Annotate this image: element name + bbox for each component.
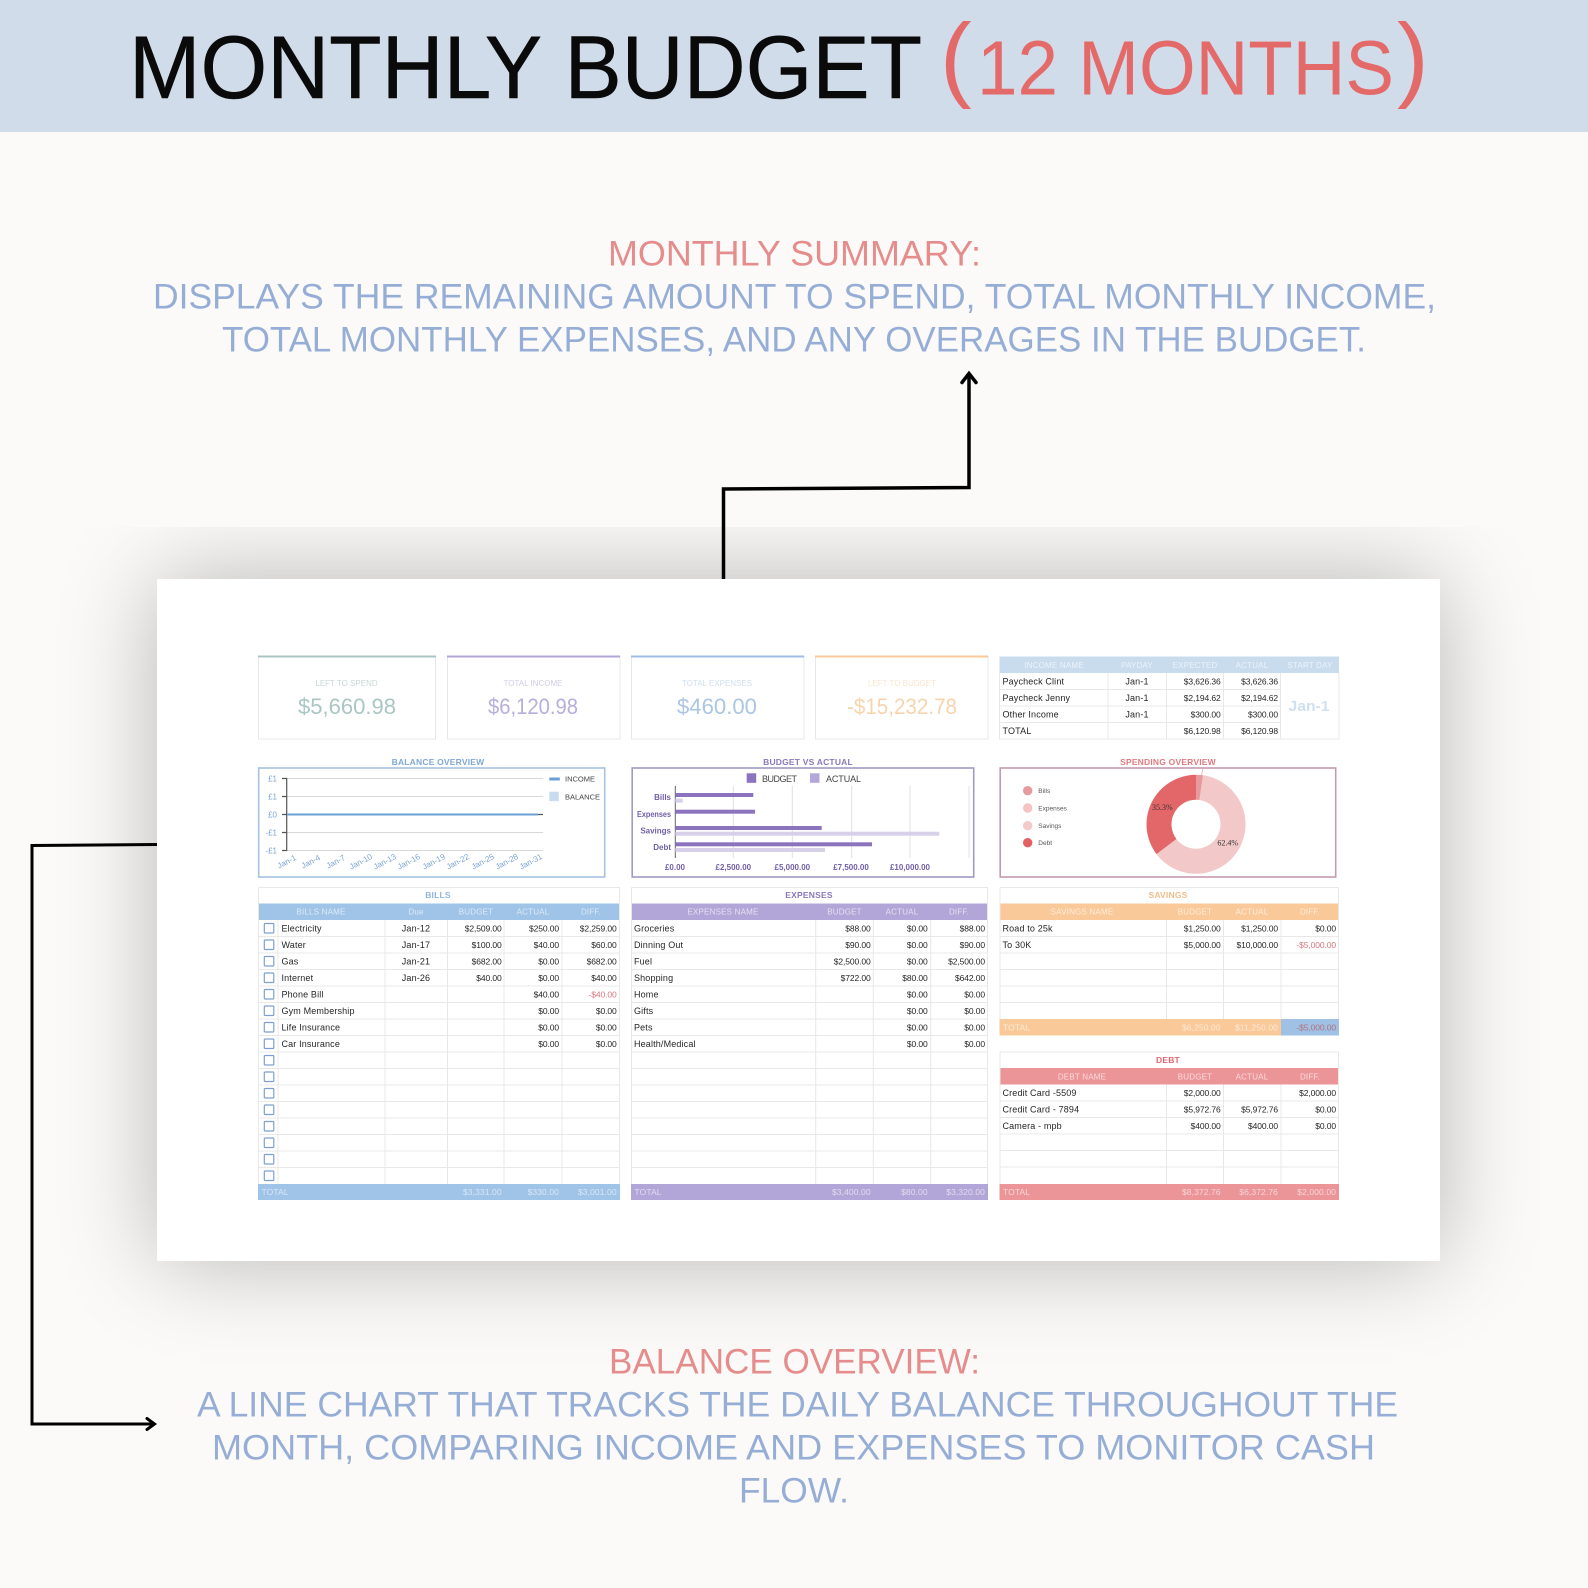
table: expenses: EXPENSES — [785, 890, 833, 900]
text block: monthly summary: DISPLAYS THE REMAINING AMOUNT TO SPEND, TOTAL MONTHLY INCOME, — [153, 278, 1436, 316]
chart: budget vs actual: £2,500.00 — [716, 863, 752, 872]
table: expenses: $0.00 — [907, 924, 928, 934]
table: expenses: $642.00 — [955, 973, 985, 983]
table: income: INCOME NAME — [1024, 661, 1084, 670]
table: savings: $0.00 — [1315, 924, 1336, 934]
table: expenses: $80.00 — [902, 973, 928, 983]
table: income: Jan-1 — [1125, 693, 1149, 703]
table: expenses: $3,400.00 — [832, 1187, 871, 1197]
table: savings: $1,250.00 — [1241, 924, 1278, 934]
chart: spending overview donut: SPENDING OVERVIEW — [1120, 757, 1217, 767]
table: expenses: $722.00 — [841, 973, 871, 983]
chart: budget vs actual: Expenses — [637, 810, 671, 819]
table: debt: $2,000.00 — [1297, 1187, 1336, 1197]
table: bills: Internet — [282, 973, 314, 983]
table: expenses: $0.00 — [907, 1006, 928, 1016]
table: debt: $2,000.00 — [1184, 1088, 1221, 1098]
table: savings: ACTUAL — [1236, 908, 1269, 916]
table: debt: Credit Card -5509 — [1002, 1088, 1077, 1098]
chart: balance overview: Jan-31 — [518, 852, 544, 872]
table: debt: Credit Card - 7894 — [1002, 1104, 1079, 1114]
table: income: Other Income — [1002, 710, 1059, 720]
table: debt: $0.00 — [1315, 1104, 1336, 1114]
table: expenses: $0.00 — [964, 1022, 985, 1032]
table: savings: $1,250.00 — [1184, 924, 1221, 934]
table: bills: $40.00 — [476, 973, 502, 983]
chart: budget vs actual: ACTUAL — [826, 774, 861, 784]
table: bills — [258, 888, 620, 1200]
chart: spending overview donut: 35.3% — [1152, 803, 1173, 812]
table: bills: $3,001.00 — [578, 1187, 617, 1197]
table: expenses: $0.00 — [907, 1022, 928, 1032]
chart: balance overview: Jan-10 — [348, 852, 374, 872]
table: expenses: $90.00 — [960, 940, 985, 950]
chart: balance overview: BALANCE OVERVIEW — [392, 757, 485, 767]
table: income: $6,120.98 — [1184, 726, 1221, 736]
table: expenses: Pets — [634, 1022, 653, 1032]
chart: spending overview donut: Savings — [1038, 823, 1062, 830]
table: savings: $11,250.00 — [1235, 1022, 1278, 1032]
card: left to spend: $5,660.98 — [298, 694, 396, 719]
table: expenses: BUDGET — [827, 908, 862, 916]
table: income: START DAY — [1287, 661, 1333, 670]
table: debt — [1000, 1052, 1339, 1200]
table: bills: $330.00 — [528, 1187, 559, 1197]
chart: budget vs actual: BUDGET VS ACTUAL — [763, 757, 853, 767]
chart: budget vs actual: £10,000.00 — [890, 863, 931, 872]
table: debt: $5,972.76 — [1184, 1104, 1221, 1114]
table: expenses: Home — [634, 990, 659, 1000]
text block: balance overview: A LINE CHART THAT TRACKS THE DAILY BALANCE THROUGHOUT THE — [197, 1386, 1398, 1424]
table: bills: $2,509.00 — [465, 924, 502, 934]
table: debt: Camera - mpb — [1002, 1121, 1062, 1131]
table: bills: $0.00 — [538, 956, 559, 966]
chart: budget vs actual: £0.00 — [665, 863, 686, 872]
card: total expenses: TOTAL EXPENSES — [682, 679, 752, 688]
card: total income: TOTAL INCOME — [504, 679, 562, 688]
table: bills: Jan-12 — [402, 924, 430, 934]
table: bills: $40.00 — [534, 940, 559, 950]
table: debt: $0.00 — [1315, 1121, 1336, 1131]
text block: monthly summary: MONTHLY SUMMARY: — [608, 234, 981, 274]
table: bills: $40.00 — [591, 973, 617, 983]
table: bills: Jan-26 — [402, 973, 430, 983]
table: income: Jan-1 — [1288, 698, 1330, 715]
card: left to budget: -$15,232.78 — [847, 694, 957, 719]
table: expenses: ACTUAL — [886, 908, 919, 916]
table: expenses: $0.00 — [907, 990, 928, 1000]
table: debt: $8,372.76 — [1182, 1187, 1221, 1197]
chart: spending overview donut: 62.4% — [1217, 838, 1238, 848]
table: savings: -$5,000.00 — [1296, 1022, 1336, 1032]
table: bills: BILLS NAME — [296, 908, 346, 916]
chart: balance overview: Jan-13 — [372, 852, 398, 872]
table: bills: Gym Membership — [282, 1006, 355, 1016]
table: bills: $0.00 — [596, 1006, 617, 1016]
text block: monthly summary — [153, 234, 1436, 360]
table: expenses: $0.00 — [964, 990, 985, 1000]
table: debt: DEBT NAME — [1058, 1072, 1106, 1082]
chart: balance overview: -£1 — [265, 828, 278, 838]
table: bills: Car Insurance — [282, 1039, 340, 1049]
table: expenses: $88.00 — [960, 924, 985, 934]
table: debt: $400.00 — [1191, 1121, 1221, 1131]
table: savings: $10,000.00 — [1236, 940, 1278, 950]
table: debt: $2,000.00 — [1299, 1088, 1336, 1098]
table: expenses: Fuel — [634, 956, 652, 966]
table: bills: $0.00 — [596, 1039, 617, 1049]
card: total expenses: $460.00 — [677, 694, 757, 719]
table: expenses: Health/Medical — [634, 1039, 696, 1049]
chart: spending overview donut: Bills — [1038, 788, 1051, 795]
table: bills: ACTUAL — [517, 908, 550, 916]
table: income: $300.00 — [1248, 710, 1278, 720]
chart: balance overview: Jan-19 — [421, 852, 447, 872]
table: income: $3,626.36 — [1241, 676, 1278, 686]
table: savings: TOTAL — [1003, 1022, 1030, 1032]
table: debt: DIFF. — [1300, 1072, 1320, 1082]
table: expenses: $0.00 — [964, 1039, 985, 1049]
table: bills: BUDGET — [459, 908, 493, 916]
title: MONTHLY BUDGET — [129, 17, 922, 117]
table: bills: $60.00 — [591, 940, 617, 950]
table: expenses: Shopping — [634, 973, 673, 983]
card: total expenses — [631, 656, 804, 739]
table: savings: SAVINGS — [1148, 890, 1188, 900]
table: expenses: $0.00 — [907, 1039, 928, 1049]
table: expenses: Groceries — [634, 924, 675, 934]
chart: balance overview: Jan-28 — [494, 852, 520, 872]
table: savings: $6,250.00 — [1182, 1022, 1221, 1032]
chart: balance overview — [259, 757, 605, 877]
chart: balance overview: £0 — [268, 810, 278, 820]
table: expenses: $2,500.00 — [834, 956, 871, 966]
table: bills: $0.00 — [596, 1022, 617, 1032]
table: expenses: Gifts — [634, 1006, 654, 1016]
table: income: Jan-1 — [1125, 710, 1149, 720]
table: debt: $6,372.76 — [1239, 1187, 1278, 1197]
table: savings: Road to 25k — [1002, 924, 1053, 934]
chart: spending overview donut — [1000, 757, 1336, 877]
table: bills: $3,331.00 — [463, 1187, 502, 1197]
table: income — [1000, 656, 1339, 739]
table: expenses: $3,320.00 — [946, 1187, 985, 1197]
panel: dashboard sheet with drop shadow — [157, 579, 1440, 1261]
table: bills: $100.00 — [472, 940, 502, 950]
table: debt: TOTAL — [1003, 1187, 1030, 1197]
table: bills: $0.00 — [538, 1039, 559, 1049]
table: debt: $400.00 — [1248, 1121, 1278, 1131]
card: total income: $6,120.98 — [488, 694, 578, 719]
card: left to spend — [258, 656, 436, 739]
chart: spending overview donut: Debt — [1038, 840, 1052, 847]
table: expenses: $2,500.00 — [948, 956, 985, 966]
title accent: ( — [940, 4, 972, 110]
chart: budget vs actual: Debt — [653, 843, 671, 852]
table: savings: -$5,000.00 — [1296, 940, 1336, 950]
chart: balance overview: £1 — [268, 774, 278, 784]
table: income: $6,120.98 — [1241, 726, 1278, 736]
table: bills: $682.00 — [587, 956, 617, 966]
table: income: Paycheck Jenny — [1002, 693, 1070, 703]
table: savings — [1000, 888, 1339, 1036]
title accent: 12 MONTHS — [977, 26, 1394, 112]
table: debt: BUDGET — [1178, 1072, 1212, 1082]
title accent: ) — [1397, 4, 1429, 110]
table: bills: $0.00 — [538, 1022, 559, 1032]
table: income: Paycheck Clint — [1002, 676, 1064, 686]
table: income: $2,194.62 — [1184, 693, 1221, 703]
table: bills: TOTAL — [262, 1187, 289, 1197]
table: expenses: DIFF. — [949, 908, 969, 916]
table: bills: Gas — [282, 956, 299, 966]
text block: balance overview: MONTH, COMPARING INCOME AND EXPENSES TO MONITOR CASH — [212, 1428, 1375, 1468]
table: bills: $2,259.00 — [580, 924, 617, 934]
chart: balance overview: Jan-25 — [470, 852, 496, 872]
chart: budget vs actual: £7,500.00 — [833, 863, 869, 872]
table: expenses: EXPENSES NAME — [687, 908, 759, 916]
table: expenses: $90.00 — [845, 940, 871, 950]
table: bills: Electricity — [282, 924, 322, 934]
table: income: PAYDAY — [1121, 661, 1153, 670]
table: income: $300.00 — [1191, 710, 1221, 720]
table: bills: $250.00 — [529, 924, 559, 934]
text block: balance overview — [197, 1342, 1398, 1510]
chart: budget vs actual: Savings — [640, 827, 672, 836]
table: bills: Phone Bill — [282, 990, 324, 1000]
arrow: dashboard down to balance overview text — [32, 844, 157, 1430]
table: savings: SAVINGS NAME — [1051, 908, 1113, 916]
chart: balance overview: INCOME — [565, 774, 595, 784]
checkboxes — [264, 924, 274, 1180]
arrow: dashboard up to monthly summary — [724, 374, 976, 579]
table: savings: To 30K — [1002, 940, 1031, 950]
chart: budget vs actual: BUDGET — [762, 774, 798, 784]
table: bills: $0.00 — [538, 1006, 559, 1016]
table: bills: Water — [282, 940, 306, 950]
table: bills: Due — [408, 908, 424, 916]
table: bills: -$40.00 — [589, 990, 617, 1000]
table: expenses: $0.00 — [907, 956, 928, 966]
table: income: Jan-1 — [1125, 676, 1149, 686]
table: savings: DIFF. — [1300, 908, 1320, 916]
table: bills: Jan-17 — [402, 940, 430, 950]
header band — [0, 0, 1588, 132]
text block: balance overview: BALANCE OVERVIEW: — [609, 1342, 980, 1382]
table: income: $2,194.62 — [1241, 693, 1278, 703]
card: left to spend: LEFT TO SPEND — [315, 679, 378, 688]
table: expenses: $0.00 — [907, 940, 928, 950]
table: bills: $0.00 — [538, 973, 559, 983]
table: debt: DEBT — [1156, 1055, 1181, 1065]
table: bills: $682.00 — [472, 956, 502, 966]
table: expenses: $0.00 — [964, 1006, 985, 1016]
table: bills: $40.00 — [534, 990, 559, 1000]
table: bills: Life Insurance — [282, 1022, 340, 1032]
text block: monthly summary: TOTAL MONTHLY EXPENSES, AND ANY OVERAGES IN THE BUDGET. — [222, 320, 1366, 360]
chart: balance overview: BALANCE — [565, 792, 600, 802]
chart: balance overview: Jan-7 — [325, 853, 347, 870]
table: expenses: Dinning Out — [634, 940, 684, 950]
table: income: $3,626.36 — [1184, 676, 1221, 686]
chart: spending overview donut: Expenses — [1038, 805, 1068, 812]
table: expenses: $88.00 — [845, 924, 871, 934]
chart: budget vs actual — [632, 757, 974, 877]
chart: balance overview: Jan-4 — [300, 853, 322, 870]
table: bills: Jan-21 — [402, 956, 430, 966]
table: bills: BILLS — [425, 890, 451, 900]
table: debt: $5,972.76 — [1241, 1104, 1278, 1114]
table: savings: $5,000.00 — [1184, 940, 1221, 950]
chart: balance overview: -£1 — [265, 846, 278, 856]
table: expenses — [631, 888, 988, 1200]
table: income: TOTAL — [1002, 726, 1031, 736]
card: left to budget: LEFT TO BUDGET — [868, 679, 936, 688]
chart: budget vs actual: £5,000.00 — [775, 863, 811, 872]
chart: balance overview: £1 — [268, 792, 278, 802]
chart: balance overview: Jan-1 — [276, 853, 298, 870]
table: debt: ACTUAL — [1236, 1072, 1269, 1082]
card: left to budget — [815, 656, 988, 739]
table: expenses: TOTAL — [634, 1187, 662, 1197]
table: income: EXPECTED — [1173, 661, 1217, 670]
chart: balance overview: Jan-22 — [445, 852, 471, 872]
table: expenses: $80.00 — [901, 1187, 928, 1197]
table: savings: BUDGET — [1178, 908, 1212, 916]
table: income: ACTUAL — [1236, 661, 1269, 670]
text block: balance overview: FLOW. — [739, 1472, 849, 1510]
table: bills: DIFF. — [581, 908, 601, 916]
chart: budget vs actual: Bills — [654, 793, 672, 802]
card: total income — [447, 656, 620, 739]
chart: balance overview: Jan-16 — [396, 852, 422, 872]
